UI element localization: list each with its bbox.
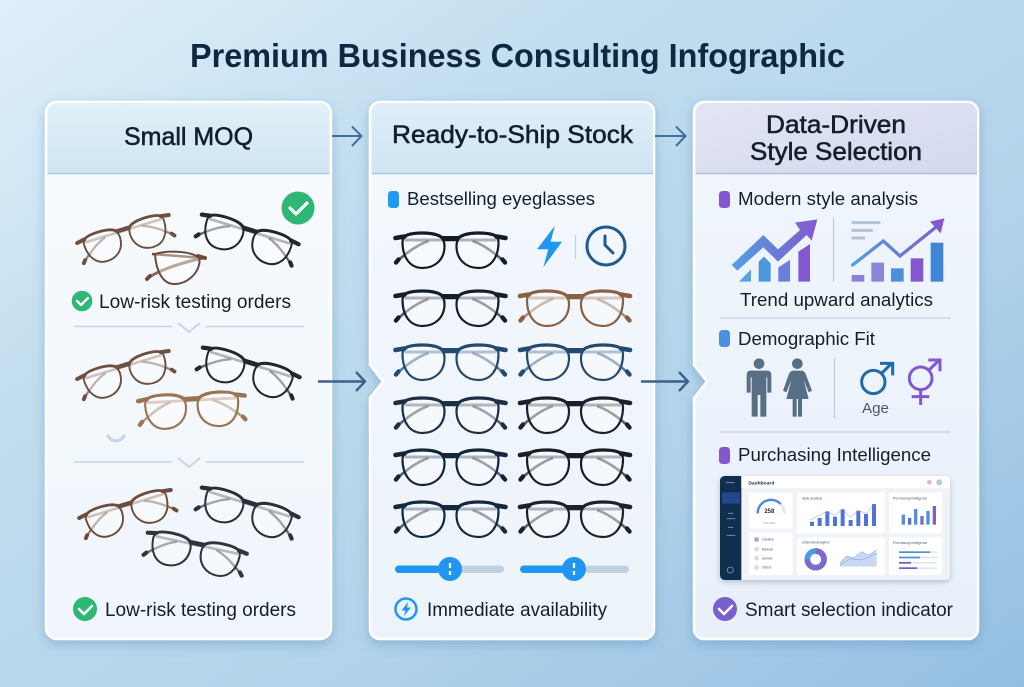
arrow: top 2	[655, 126, 686, 146]
panel 1 card	[46, 102, 331, 639]
divider 2	[720, 431, 951, 433]
dashboard mockup: Style analysis	[802, 497, 823, 501]
dashboard mockup: 258	[764, 509, 775, 515]
section: purchasing intelligence heading: Purchasing Intelligence	[738, 445, 931, 465]
divider 1	[720, 317, 951, 319]
panel: Ready-to-Ship Stock	[370, 102, 654, 639]
dashboard mockup: Gridental analytics	[802, 541, 830, 545]
bullet heading: Bestselling eyeglasses	[407, 189, 595, 209]
chart: bars and trend line	[852, 218, 944, 282]
icon: male symbol	[862, 363, 893, 394]
panel 1 header	[48, 103, 330, 174]
dashboard mockup: Cardinal	[762, 538, 774, 542]
panel 2 header	[372, 103, 653, 174]
availability row: Immediate availability	[427, 599, 607, 621]
dashboard mockup: Purchasing intelligence	[893, 541, 927, 545]
age label: Age	[862, 401, 889, 417]
icon: man and woman figures	[747, 358, 812, 417]
eyeglasses group 2	[76, 343, 301, 430]
divider chevron 2	[74, 458, 304, 467]
dashboard mockup	[720, 476, 950, 580]
dashboard mockup: Dashboard	[748, 481, 774, 487]
panel 3 header: Data-Driven	[766, 111, 906, 139]
section: modern style analysis heading: Modern style analysis	[738, 189, 918, 209]
panel 1 header: Small MOQ	[124, 123, 253, 151]
title: Premium Business Consulting Infographic	[190, 37, 845, 74]
check row 2: Low-risk testing orders	[105, 599, 296, 621]
arrow: middle 2	[641, 372, 688, 391]
panel 2 header: Ready-to-Ship Stock	[392, 121, 634, 149]
arrow: top 1	[332, 126, 362, 146]
section: demographic fit heading: Demographic Fit	[738, 329, 875, 349]
dashboard mockup: Others	[762, 566, 772, 570]
dashboard mockup: Purchasing intelligence	[893, 497, 927, 501]
arrow: middle 1	[318, 372, 365, 391]
slider 1	[395, 557, 504, 581]
slider 2	[520, 557, 629, 581]
smile arc	[108, 436, 124, 441]
caption: trend upward analytics: Trend upward analytics	[740, 290, 933, 310]
check row 1: Low-risk testing orders	[99, 291, 291, 313]
icon: gender symbol	[909, 360, 940, 405]
icon: large check badge	[282, 192, 314, 224]
panel 2 card	[370, 102, 654, 639]
panel 3 header: Style Selection	[750, 138, 922, 166]
divider: demographic	[834, 358, 836, 418]
eyeglasses group 3	[78, 483, 300, 581]
chart: trend arrow with bars	[732, 219, 817, 282]
panel: Small MOQ	[46, 102, 331, 639]
panel 3 card	[694, 102, 978, 639]
eyeglasses group 1	[76, 210, 300, 284]
smart selection row: Smart selection indicator	[745, 600, 954, 621]
icon: lightning bolt	[537, 226, 562, 267]
divider chevron 1	[74, 323, 304, 332]
icon: clock	[576, 227, 625, 265]
panel: Data-Driven Style Selection	[694, 102, 978, 639]
eyeglasses grid	[396, 233, 630, 537]
dashboard mockup: Medium	[762, 547, 774, 551]
dashboard mockup: Gender	[762, 556, 773, 560]
divider: charts	[832, 217, 834, 282]
panel 3 header	[696, 103, 977, 174]
dashboard mockup: Trend analysis	[763, 521, 776, 524]
